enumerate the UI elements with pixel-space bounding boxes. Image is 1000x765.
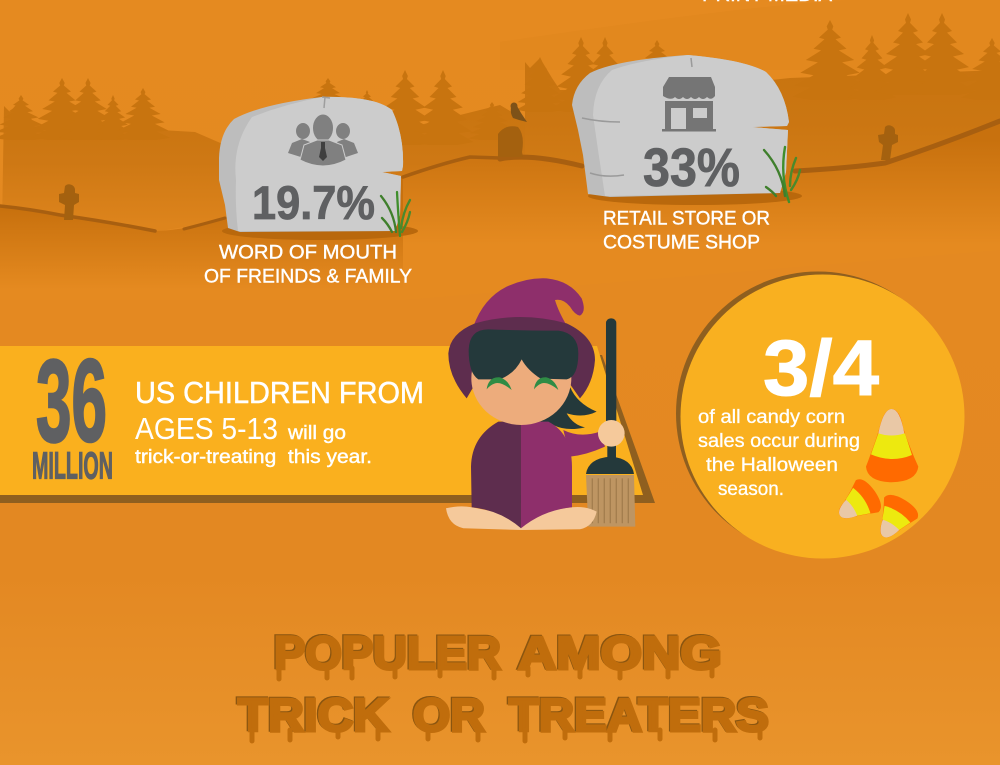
title shadow: TRICK [237, 688, 388, 740]
hat brim [448, 317, 595, 398]
hair fringe [469, 329, 578, 379]
tombstone: word of mouth [219, 97, 418, 240]
gravestone with crow [498, 102, 527, 157]
title fill: TREATERS [509, 689, 769, 741]
grave cross: right [878, 125, 898, 160]
stone face [235, 97, 403, 231]
distant band top right [500, 0, 1000, 70]
label: retail store: COSTUME SHOP [603, 232, 760, 254]
hill: left [0, 177, 403, 300]
eye right [534, 377, 558, 390]
icon: three people [288, 114, 358, 166]
stat: 3/4: 3/4 [763, 323, 879, 412]
stat: 36 million: MILLION [32, 446, 113, 488]
stone side [219, 97, 403, 232]
label: retail store [603, 208, 770, 254]
title shadow [237, 626, 768, 740]
tree silhouette: left forest [0, 70, 525, 232]
stone shadow [222, 222, 418, 240]
circle text: the Halloween [706, 455, 838, 476]
hill ridge lines [0, 121, 1000, 231]
stat: 36 million: 36 [36, 335, 107, 466]
hat cone [473, 278, 584, 328]
stat: 19.7%: 19.7% [252, 176, 375, 229]
title drips [252, 668, 760, 741]
stat: 36 million [32, 335, 113, 488]
stone shadow [588, 187, 802, 205]
circle text: season. [718, 479, 784, 500]
broom [586, 318, 635, 527]
banner text: AGES 5-13 [135, 411, 278, 446]
body left [471, 422, 521, 528]
banner text: will go [287, 423, 346, 444]
circle text [698, 407, 860, 500]
label: word of mouth: WORD OF MOUTH [219, 242, 397, 264]
body right [521, 422, 572, 528]
banner [0, 335, 655, 503]
banner text: US CHILDREN FROM [135, 375, 424, 410]
skirt hem [446, 506, 597, 530]
face [471, 332, 571, 425]
title: dripping heading [237, 626, 769, 741]
title fill: TRICK [238, 689, 389, 741]
title fill [238, 627, 769, 741]
circle shadow [676, 272, 960, 556]
crack [322, 97, 330, 108]
banner body [0, 346, 643, 495]
hair back [537, 387, 597, 429]
circle stat: candy corn [676, 272, 964, 558]
icon: grass [381, 192, 410, 236]
circle text: sales occur during [698, 431, 860, 452]
title shadow: TREATERS [508, 688, 768, 740]
stat: 33%: 33% [643, 138, 740, 198]
banner shadow [0, 355, 655, 503]
cracks [582, 58, 692, 176]
banner text [135, 375, 424, 468]
tree silhouette: right forest [516, 13, 1000, 172]
icon: store [662, 77, 716, 132]
icon: candy corn [829, 409, 922, 547]
title shadow: OR [412, 688, 484, 740]
label: word of mouth [204, 242, 412, 288]
label: retail store: RETAIL STORE OR [603, 208, 770, 230]
hand [598, 420, 625, 447]
witch character [446, 278, 635, 530]
hill: right [403, 120, 1000, 300]
title shadow: AMONG [517, 626, 721, 678]
circle body [680, 274, 964, 558]
circle text: of all candy corn [698, 407, 845, 428]
stone face [593, 55, 789, 196]
title fill: AMONG [518, 627, 722, 679]
icon: grass [764, 147, 800, 202]
stone side [572, 55, 789, 197]
arm [563, 430, 605, 457]
title fill: OR [413, 689, 485, 741]
banner text: trick-or-treating this year. [135, 447, 372, 468]
grave cross: left [59, 184, 79, 220]
title shadow: POPULER [273, 626, 500, 678]
label: word of mouth: OF FREINDS & FAMILY [204, 266, 412, 288]
tombstone: retail store [572, 55, 802, 205]
eye left [487, 377, 512, 390]
title fill: POPULER [274, 627, 501, 679]
